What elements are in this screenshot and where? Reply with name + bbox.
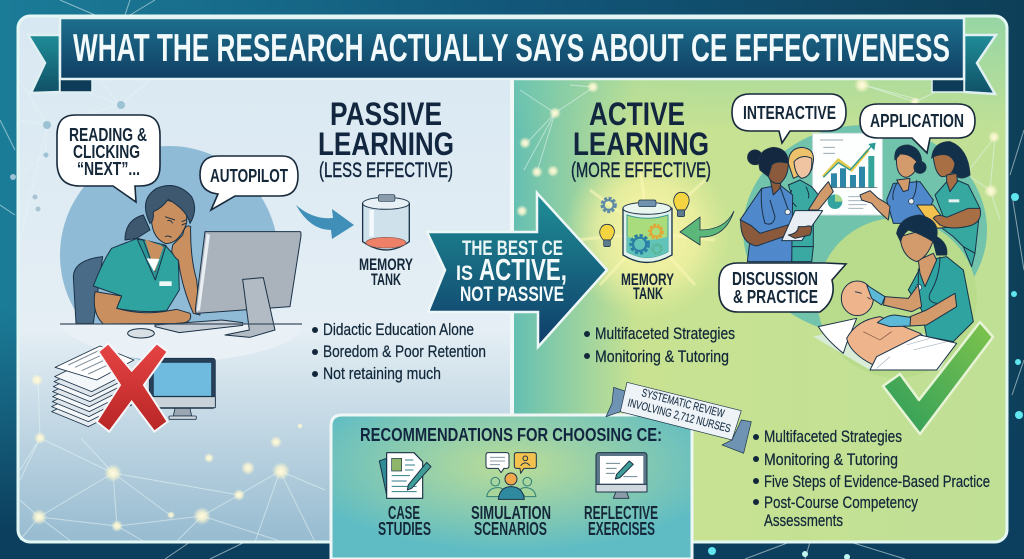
arrow: to passive memory tank <box>296 205 354 239</box>
label: reflective exercises: EXERCISES <box>588 519 655 539</box>
label: simulation scenarios <box>471 503 551 539</box>
bubble: autopilot <box>200 156 298 210</box>
bullet list: active middle <box>584 324 735 366</box>
panel: recommendations for choosing CE <box>331 415 692 559</box>
bubble: discussion and practice: & PRACTICE <box>733 287 818 307</box>
panel: passive learning background <box>10 16 512 542</box>
scene: glow behind active tank <box>563 148 733 318</box>
heading: active learning: LEARNING <box>573 126 709 162</box>
icon: empty memory tank <box>359 195 413 289</box>
bubble: interactive <box>732 94 846 143</box>
icon: simulation scenarios <box>486 453 536 499</box>
label: reflective exercises: REFLECTIVE <box>584 503 658 523</box>
icon: green check mark <box>883 322 993 434</box>
nurse: teal scrubs with yellow clipboard <box>917 142 981 267</box>
bullet list: active middle: Monitoring & Tutoring <box>595 347 729 366</box>
ribbon: systematic review <box>606 382 751 453</box>
bubble: discussion and practice <box>719 263 846 312</box>
heading: passive learning: LEARNING <box>318 126 454 162</box>
bullet list: passive <box>312 320 486 383</box>
bullet list: passive: Not retaining much <box>323 364 441 383</box>
label: simulation scenarios: SCENARIOS <box>474 519 547 539</box>
icon: reflective exercises <box>596 453 647 498</box>
bullet list: active middle: Multifaceted Strategies <box>595 324 735 343</box>
heading: passive learning <box>318 96 454 182</box>
bullet list: active right: Monitoring & Tutoring <box>764 450 898 469</box>
bullet list: passive: Didactic Education Alone <box>323 320 474 339</box>
bullet list: passive: Boredom & Poor Retention <box>323 342 486 361</box>
nurse: blonde <box>788 147 833 262</box>
ribbon: systematic review: INVOLVING 2,712 NURSES <box>626 397 732 436</box>
heading: passive learning: PASSIVE <box>330 96 442 132</box>
panel: active learning background <box>512 16 1007 542</box>
scene: bored nurse at computer <box>60 146 302 364</box>
ribbon: systematic review: SYSTEMATIC REVIEW <box>640 387 726 420</box>
bullet list: active right <box>753 427 990 530</box>
center arrow callout: NOT PASSIVE <box>460 283 564 306</box>
heading: active learning: ACTIVE <box>589 96 685 132</box>
bullet list: active right: Post-Course Competency <box>764 493 918 512</box>
label: case studies: CASE <box>388 503 420 523</box>
label: simulation scenarios: SIMULATION <box>471 503 551 523</box>
bubble: reading and clicking next <box>57 115 160 202</box>
nurse: dark hair with clipboard <box>740 147 823 262</box>
center arrow callout: ACTIVE, <box>479 252 567 287</box>
bubble: autopilot: AUTOPILOT <box>210 166 288 186</box>
bubble: interactive: INTERACTIVE <box>743 103 836 123</box>
icon: full memory tank with gears and bulbs <box>600 192 689 303</box>
bullet list: active right: Multifaceted Strategies <box>764 427 902 446</box>
icon: paper stack and computer crossed out <box>52 343 215 432</box>
icon: full memory tank with gears and bulbs: TANK <box>633 285 663 303</box>
icon: full memory tank with gears and bulbs: MEMORY <box>621 271 674 289</box>
bullet list: active right: Assessments <box>764 511 843 530</box>
center arrow callout: THE BEST CE <box>462 237 563 260</box>
label: case studies <box>378 503 431 539</box>
icon: case studies <box>379 453 431 498</box>
chart board <box>813 133 882 215</box>
heading: active learning <box>571 96 711 182</box>
bubble: reading and clicking next: READING & <box>69 125 147 145</box>
title banner <box>28 18 996 94</box>
bubble: reading and clicking next: “NEXT”... <box>77 159 140 179</box>
bubble: application: APPLICATION <box>870 111 964 131</box>
center arrow callout <box>427 193 607 347</box>
bubble: discussion and practice: DISCUSSION <box>732 269 818 289</box>
bubble: reading and clicking next: CLICKING <box>73 142 140 162</box>
scene: nurse examining patient <box>813 215 973 370</box>
scene: nurses reviewing chart <box>740 125 987 378</box>
center arrow callout: IS <box>456 262 473 285</box>
recommendations heading: RECOMMENDATIONS FOR CHOOSING CE: <box>360 424 662 445</box>
nurse: blue scrubs gesturing <box>860 145 933 223</box>
icon: empty memory tank: TANK <box>371 271 401 289</box>
heading: passive learning: (LESS EFFECTIVE) <box>319 159 453 182</box>
label: reflective exercises <box>584 503 658 539</box>
bubble: application <box>860 104 975 153</box>
label: case studies: STUDIES <box>378 519 431 539</box>
arrow: to active memory tank <box>680 211 734 245</box>
icon: empty memory tank: MEMORY <box>359 256 413 274</box>
heading: active learning: (MORE EFFECTIVE) <box>571 159 711 182</box>
